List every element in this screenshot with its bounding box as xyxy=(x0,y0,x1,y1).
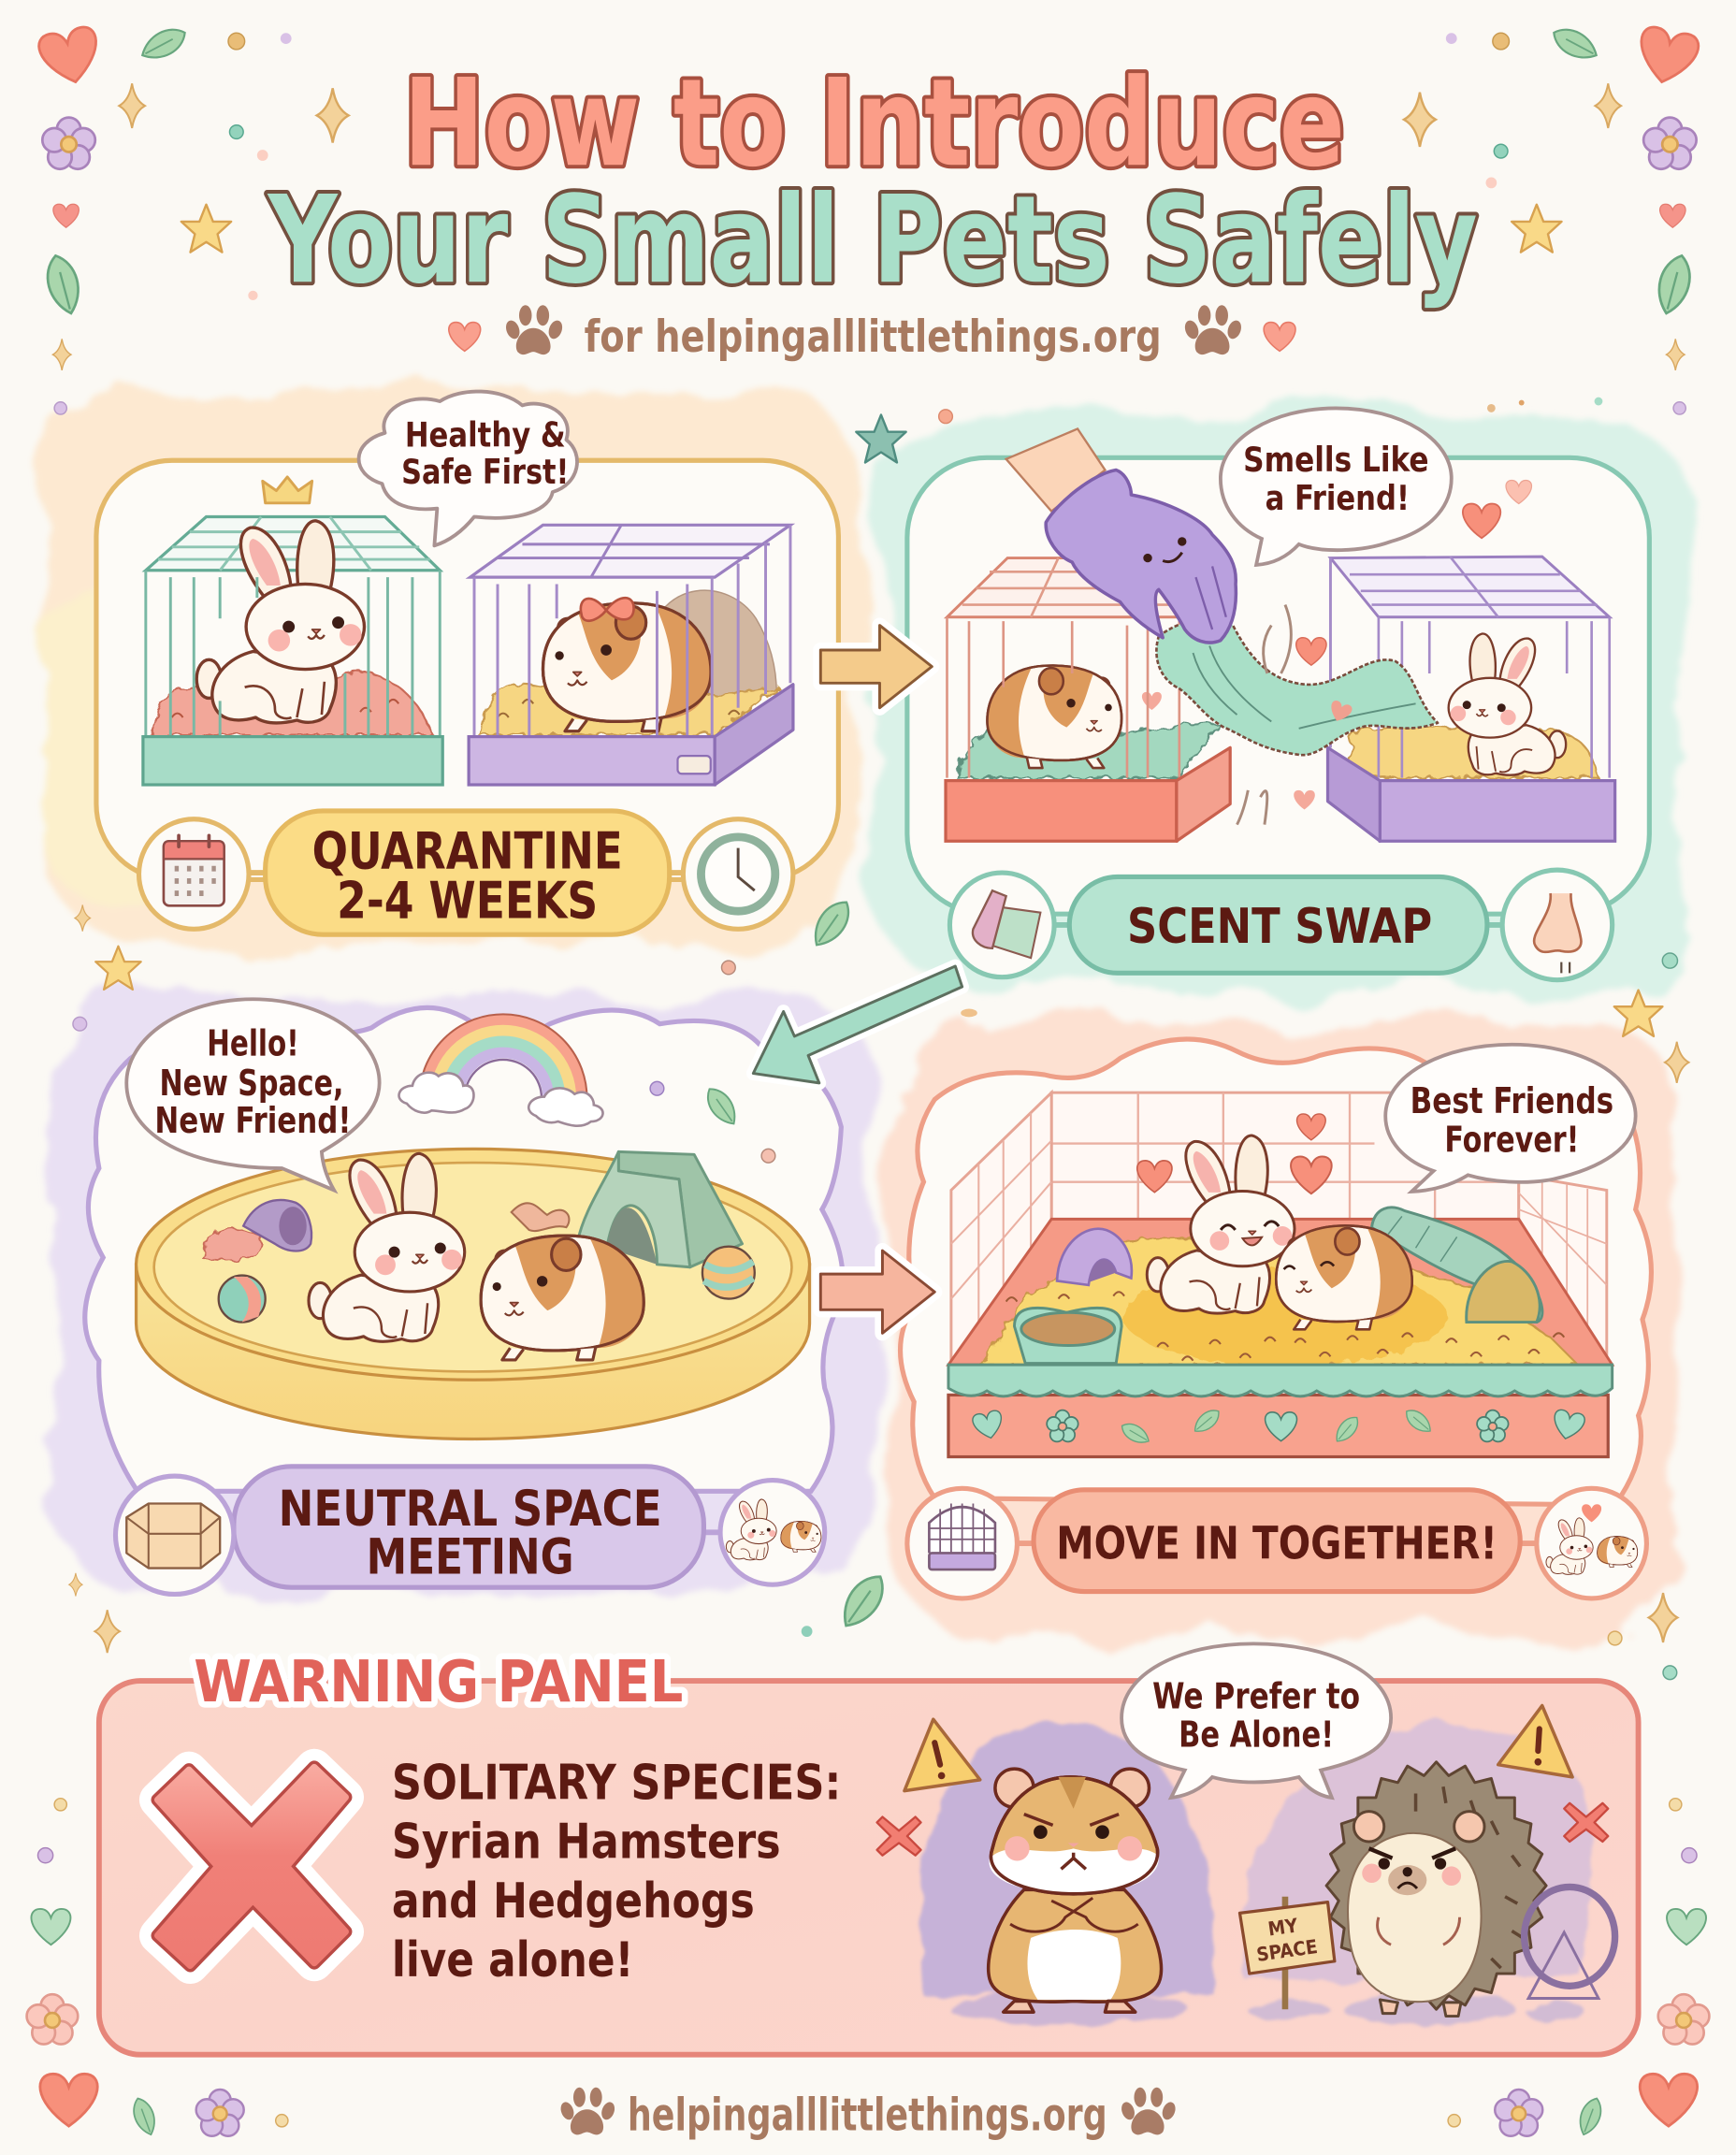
cage: purple with rabbit xyxy=(1328,557,1615,841)
warning text: SOLITARY SPECIES: xyxy=(392,1755,841,1811)
icon: bow xyxy=(581,598,634,621)
angry hamster xyxy=(989,1769,1162,2012)
panel: step 1 quarantine xyxy=(96,392,838,934)
panel frame xyxy=(96,460,838,879)
speech bubble: we prefer to be alone xyxy=(1121,1643,1391,1798)
purple hide xyxy=(1057,1229,1132,1285)
speech bubble: hello: New Space, xyxy=(160,1063,343,1105)
arrow: step 1 to 2 xyxy=(820,626,932,708)
icon: calendar xyxy=(138,819,249,929)
panel: step 2 scent swap xyxy=(907,408,1649,980)
arrow: step 3 to 4 xyxy=(820,1251,934,1333)
label: quarantine: QUARANTINE xyxy=(312,822,623,881)
label: move in together: MOVE IN TOGETHER! xyxy=(1056,1517,1497,1569)
footer: helpingalllittlethings.org xyxy=(628,2090,1107,2142)
label: scent swap: SCENT SWAP xyxy=(1127,899,1432,955)
speech bubble: healthy and safe: Healthy & xyxy=(405,415,566,456)
subtitle: for helpingalllittlethings.org xyxy=(585,311,1162,363)
sign: my space: MY xyxy=(1266,1914,1300,1941)
speech bubble: smells like a friend: Smells Like xyxy=(1243,440,1429,480)
label: quarantine xyxy=(266,811,670,934)
guinea pig xyxy=(481,1236,644,1360)
speech bubble: hello xyxy=(126,999,380,1190)
arrow: step 2 to 3 xyxy=(753,966,962,1083)
panel frame xyxy=(907,457,1649,914)
speech bubble: best friends: Forever! xyxy=(1444,1120,1579,1161)
side and bottom decorations left xyxy=(27,1799,288,2138)
tunnel xyxy=(1372,1208,1542,1323)
warning text: live alone! xyxy=(392,1932,633,1989)
icon: large red X xyxy=(157,1767,345,1966)
speech bubble: we prefer to be alone: We Prefer to xyxy=(1152,1676,1360,1717)
mid-page scatter decorations xyxy=(69,398,1689,1680)
connector bars xyxy=(228,1530,723,1534)
icons: warning triangles xyxy=(904,1706,1572,1791)
playpen xyxy=(137,1149,810,1439)
sign: my space xyxy=(1239,1897,1335,2009)
icon: nose xyxy=(1502,870,1613,980)
watercolor washes xyxy=(47,390,1685,1633)
connector bars xyxy=(1014,1541,1540,1545)
label: neutral space meeting: MEETING xyxy=(367,1528,574,1585)
title: How to Introduce xyxy=(403,53,1345,194)
angry hedgehog xyxy=(1326,1762,1546,2017)
playpen toys xyxy=(202,1151,755,1323)
panel: step 3 neutral space xyxy=(85,999,843,1594)
title xyxy=(267,53,1478,311)
cage: coral with guinea pig xyxy=(946,558,1230,841)
hearts xyxy=(1137,1114,1332,1193)
glove with face xyxy=(1046,470,1236,643)
label: neutral space meeting xyxy=(234,1467,703,1587)
corner decorations: top right xyxy=(1404,22,1700,414)
rabbit xyxy=(1147,1135,1295,1313)
panel: warning xyxy=(99,1643,1639,2055)
speech bubble: hello: Hello! xyxy=(207,1023,299,1064)
title: Your Small Pets Safely xyxy=(267,170,1478,311)
side and bottom decorations right xyxy=(1448,1799,1709,2138)
warning text: and Hedgehogs xyxy=(392,1873,755,1930)
icon: crown xyxy=(263,477,312,503)
icon: scent lines and hearts xyxy=(1237,481,1531,825)
leaf and dots xyxy=(650,1081,775,1163)
exercise wheel xyxy=(1525,1887,1615,1998)
panel frame xyxy=(901,1039,1651,1505)
panel: step 4 move in together xyxy=(901,1039,1651,1598)
cage: teal with rabbit xyxy=(143,516,442,785)
icon: cloth roll xyxy=(949,873,1054,977)
sign: my space: SPACE xyxy=(1255,1935,1319,1966)
label: neutral space meeting: NEUTRAL SPACE xyxy=(279,1481,662,1538)
subtitle xyxy=(449,305,1295,363)
speech bubble: smells like a friend: a Friend! xyxy=(1266,478,1410,518)
icon: small cage xyxy=(907,1488,1017,1598)
rabbit xyxy=(309,1153,465,1341)
label: scent swap xyxy=(1069,876,1487,973)
icon: playpen panels xyxy=(116,1476,234,1594)
panel frame xyxy=(85,1007,843,1491)
purple washes behind animals xyxy=(919,1722,1594,2026)
label: move in together xyxy=(1034,1490,1520,1592)
speech bubble: smells like a friend xyxy=(1221,408,1452,565)
warning text xyxy=(392,1755,841,1989)
connector bars xyxy=(248,871,685,875)
scented cloth xyxy=(1156,618,1438,755)
icon: clock xyxy=(683,819,793,929)
speech bubble: healthy and safe xyxy=(359,392,577,545)
icons: small red x marks xyxy=(877,1803,1608,1856)
guinea pig xyxy=(1276,1225,1412,1329)
speech bubble: hello: New Friend! xyxy=(154,1101,352,1142)
speech bubble: best friends: Best Friends xyxy=(1410,1081,1613,1122)
label: quarantine: 2-4 WEEKS xyxy=(337,872,598,931)
speech bubble: we prefer to be alone: Be Alone! xyxy=(1179,1715,1334,1757)
rainbow xyxy=(399,1014,603,1126)
panel background xyxy=(99,1681,1639,2055)
food bowl xyxy=(1014,1308,1121,1364)
speech bubble: best friends xyxy=(1385,1045,1636,1192)
corner decorations: top left xyxy=(36,22,349,414)
warning text: Syrian Hamsters xyxy=(392,1815,781,1871)
pen front with scallop trim xyxy=(948,1365,1613,1457)
icon: friends with heart xyxy=(1537,1488,1646,1598)
playpen with wire walls xyxy=(948,1092,1613,1367)
heading: warning panel: WARNING PANEL xyxy=(194,1648,683,1715)
speech bubble: healthy and safe: Safe First! xyxy=(401,452,569,492)
cage: purple with guinea pig xyxy=(469,525,793,785)
connector bars xyxy=(1053,923,1505,927)
icon: rabbit and guinea pig xyxy=(720,1481,825,1584)
arm xyxy=(1006,428,1105,512)
